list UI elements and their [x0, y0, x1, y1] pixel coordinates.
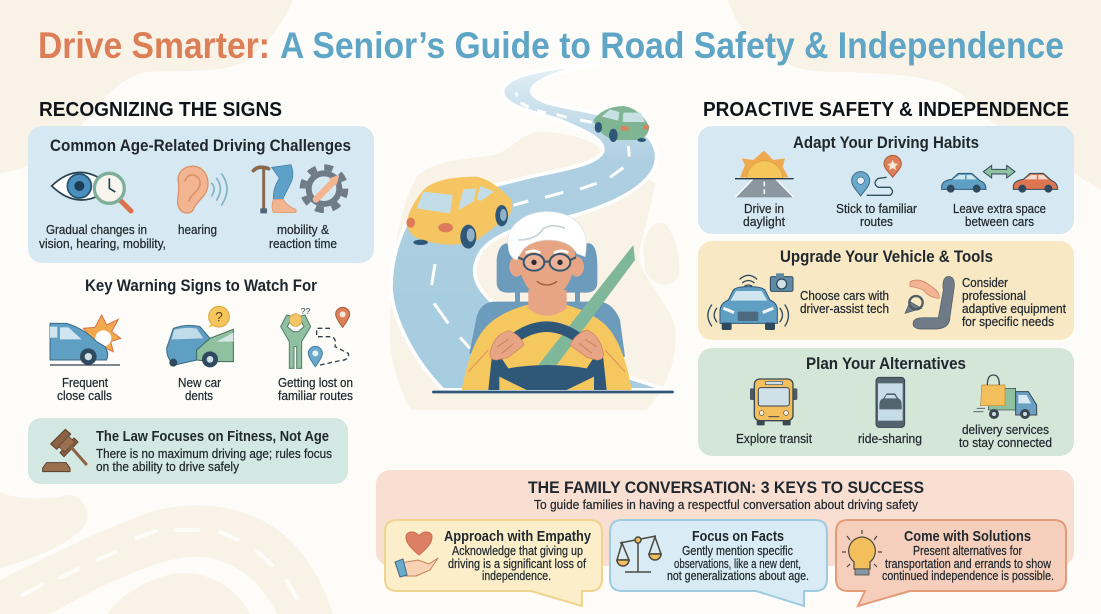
icon: cars with following distance	[942, 165, 1058, 193]
panel: upgrade your vehicle	[698, 241, 1074, 340]
labels	[39, 222, 337, 251]
panel: the law	[28, 418, 348, 484]
callout: approach with empathy: independence.	[482, 568, 551, 583]
labels: hearing	[178, 222, 217, 237]
panel: the law: There is no maximum driving age; rules focus	[96, 446, 332, 461]
panel: plan your alternatives: Plan Your Alternatives	[806, 354, 966, 373]
panel: common age-related driving challenges	[28, 126, 374, 263]
labels: Explore transit	[736, 431, 812, 446]
labels	[736, 422, 1052, 450]
icon: gear and wrench	[303, 167, 345, 210]
road dashes	[432, 93, 629, 348]
labels: Leave extra space	[953, 201, 1046, 216]
callout: focus on facts	[610, 520, 827, 606]
labels: New car	[178, 375, 222, 390]
icon: green car	[593, 106, 649, 142]
icon: car dents	[167, 306, 233, 367]
labels: familiar routes	[278, 388, 353, 403]
panel: the law: on the ability to drive safely	[96, 459, 239, 474]
labels: Consider	[962, 275, 1009, 290]
callout: focus on facts: Gently mention specific	[682, 543, 793, 558]
icon: gavel	[43, 429, 86, 472]
icon: phone with car	[876, 377, 905, 427]
icon: route with pins	[852, 155, 901, 196]
icon: balance scales	[617, 536, 661, 572]
labels	[800, 275, 1066, 329]
icon: driver-assist car	[708, 273, 793, 330]
panel: the family conversation	[376, 470, 1074, 606]
seat	[469, 243, 625, 380]
labels: professional	[962, 288, 1026, 303]
labels	[57, 375, 353, 403]
heading: proactive safety: PROACTIVE SAFETY & INDEPENDENCE	[703, 98, 1069, 121]
icon: yellow car	[406, 177, 512, 249]
callout: focus on facts: observations, like a new dent,	[674, 556, 801, 571]
labels: routes	[860, 214, 893, 229]
cream blob behind road	[390, 132, 676, 410]
panel: adapt your driving habits	[698, 126, 1074, 234]
callout: approach with empathy: Acknowledge that giving up	[452, 543, 583, 558]
labels: Stick to familiar	[836, 201, 918, 216]
labels: between cars	[965, 214, 1034, 229]
panel: adapt your driving habits: Adapt Your Driving Habits	[793, 133, 979, 152]
driver	[462, 212, 635, 390]
icon: eye and clock magnifier	[52, 172, 131, 211]
labels: driver-assist tech	[800, 301, 889, 316]
panel: the law: The Law Focuses on Fitness, Not Age	[96, 428, 329, 445]
icon: adaptive seat and hand	[905, 276, 954, 329]
callout: approach with empathy: Approach with Empathy	[444, 528, 592, 545]
callout: approach with empathy: driving is a significant loss of	[448, 556, 586, 571]
labels: to stay connected	[959, 435, 1052, 450]
icon: cane and leg	[253, 165, 296, 213]
icon: light bulb	[842, 530, 882, 575]
icon: delivery truck	[973, 375, 1037, 419]
icon: bus	[750, 379, 797, 425]
main title: Drive Smarter:	[38, 25, 270, 66]
panel: the family conversation: THE FAMILY CONVERSATION: 3 KEYS TO SUCCESS	[528, 478, 924, 497]
section: key warning signs	[50, 276, 353, 403]
callout: approach with empathy	[385, 520, 602, 606]
callout: focus on facts: not generalizations about age.	[667, 568, 809, 583]
labels	[743, 201, 1046, 229]
labels: mobility &	[277, 222, 329, 237]
labels: Frequent	[62, 375, 108, 390]
panel: common age-related driving challenges: Common Age-Related Driving Challenges	[50, 136, 351, 155]
callout: come with solutions: continued independence is possible.	[882, 568, 1054, 583]
labels: ride-sharing	[858, 431, 922, 446]
labels: daylight	[743, 214, 785, 229]
callout: come with solutions: transportation and errands to show	[885, 556, 1051, 571]
labels: for specific needs	[962, 314, 1054, 329]
labels: Choose cars with	[800, 288, 889, 303]
labels: Drive in	[744, 201, 784, 216]
section: key warning signs: Key Warning Signs to Watch For	[85, 276, 317, 295]
icon: sun and road	[735, 151, 794, 197]
labels: dents	[185, 388, 213, 403]
labels: adaptive equipment	[962, 301, 1066, 316]
icon: heart in hand	[395, 532, 438, 577]
icon: car near collision	[50, 315, 121, 365]
panel: the family conversation: To guide families in having a respectful conversation about driving safety	[534, 497, 918, 512]
steering wheel	[433, 327, 673, 392]
labels: delivery services	[962, 422, 1049, 437]
icon: ear and sound waves	[178, 166, 227, 213]
panel: upgrade your vehicle: Upgrade Your Vehicle & Tools	[780, 247, 993, 266]
callout: come with solutions: Present alternatives for	[913, 543, 1023, 558]
icon: car dents: ?	[215, 309, 223, 325]
icon: confused person and route	[281, 306, 350, 368]
labels: Gradual changes in	[46, 222, 147, 237]
central illustration: senior driver on winding road	[390, 64, 679, 410]
labels: vision, hearing, mobility,	[39, 236, 166, 251]
road	[391, 64, 667, 390]
labels: Getting lost on	[278, 375, 353, 390]
labels: reaction time	[269, 236, 337, 251]
icon: confused person and route: ??	[301, 306, 310, 316]
callout: come with solutions	[836, 520, 1066, 606]
heading: recognizing the signs: RECOGNIZING THE SIGNS	[39, 98, 282, 121]
callout: come with solutions: Come with Solutions	[904, 528, 1031, 545]
callout: focus on facts: Focus on Facts	[692, 528, 784, 545]
panel: plan your alternatives	[698, 348, 1074, 456]
labels: close calls	[57, 388, 112, 403]
